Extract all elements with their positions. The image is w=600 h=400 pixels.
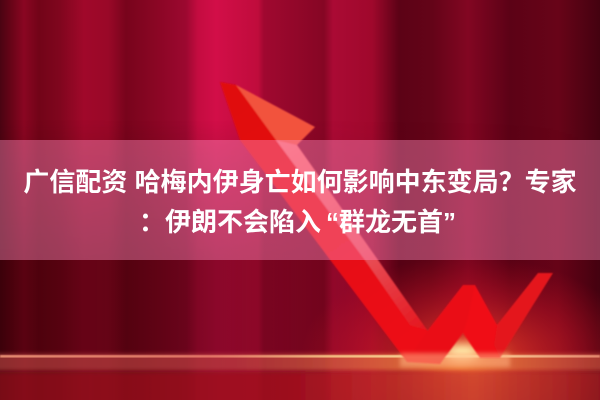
- central flare: [444, 344, 480, 360]
- floor glow: [0, 354, 600, 371]
- translucent title band: [0, 140, 600, 260]
- title text: 广信配资 哈梅内伊身亡如何影响中东变局？专家: [23, 167, 577, 197]
- arrow shaft light facet: [276, 140, 427, 330]
- orange glow behind chart: [280, 240, 600, 400]
- lower curtain shading: [0, 135, 392, 400]
- title text: [23, 167, 577, 237]
- zigzag falling stroke: [463, 285, 505, 358]
- title text: ：伊朗不会陷入“群龙无首”: [139, 207, 456, 237]
- lower floor: [0, 372, 600, 400]
- arrow shaft and head: [220, 82, 441, 364]
- zigzag final rising stroke: [494, 273, 553, 358]
- arrow head light facet: [236, 85, 315, 145]
- horizon light streak: [0, 355, 600, 358]
- zigzag rising stroke: [414, 285, 480, 364]
- glow fade over chart base: [400, 353, 510, 367]
- red rising arrow chart line: [220, 82, 553, 364]
